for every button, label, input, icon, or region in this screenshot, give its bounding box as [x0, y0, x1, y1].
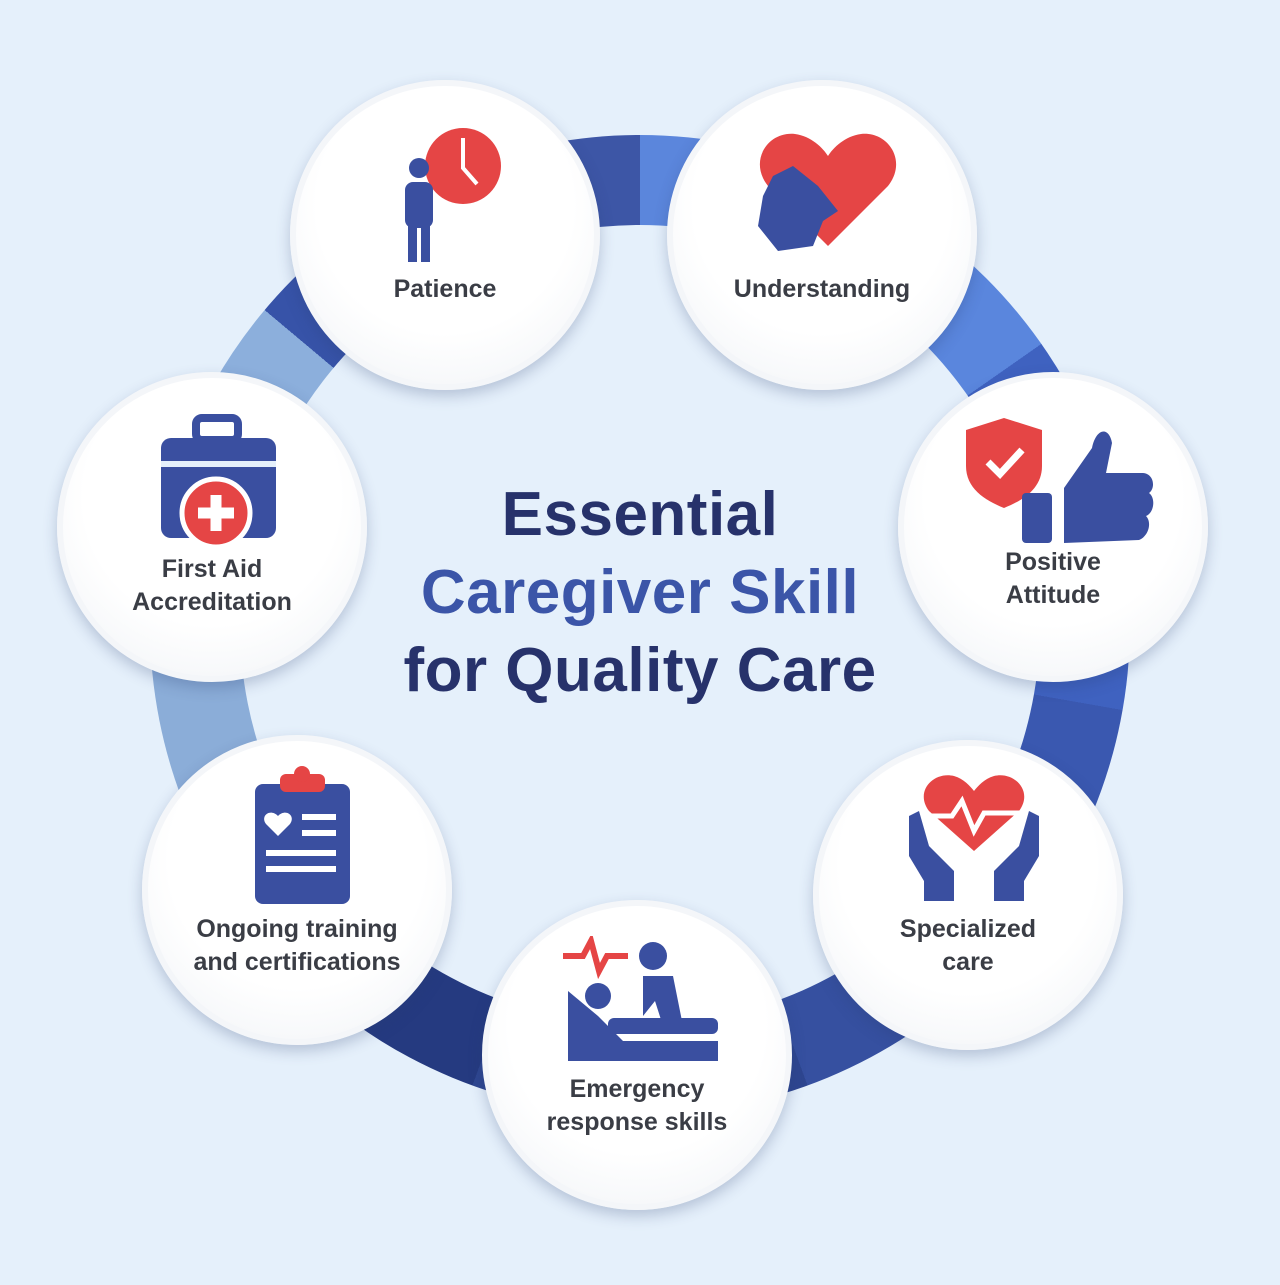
title: for Quality Care	[403, 636, 877, 705]
circle: Emergency response skills: response skills	[547, 1108, 727, 1136]
circle: Specialized care	[813, 740, 1123, 1050]
icon: clipboard	[255, 766, 350, 904]
icon: person clock	[405, 128, 501, 262]
icon: heart hand	[758, 134, 896, 251]
circle: Ongoing training: and certifications	[194, 948, 400, 976]
circle: First Aid Accreditation	[57, 372, 367, 682]
circle: Ongoing training: Ongoing training	[196, 915, 398, 943]
circle: Emergency response skills	[482, 900, 792, 1210]
circle: Emergency response skills: Emergency	[570, 1075, 704, 1103]
circle: Specialized care: care	[942, 948, 994, 976]
ring	[150, 135, 1130, 1115]
circle: Understanding: Understanding	[734, 275, 910, 303]
icon: hands heart	[909, 775, 1039, 901]
title: Essential	[502, 480, 778, 549]
circle: Ongoing training	[142, 735, 452, 1045]
circle: First Aid Accreditation: Accreditation	[132, 588, 292, 616]
circle: Patience	[290, 80, 600, 390]
icon: shield thumb	[966, 418, 1154, 543]
title: Caregiver Skill	[421, 558, 859, 627]
circle: Positive Attitude	[898, 372, 1208, 682]
circle: First Aid Accreditation: First Aid	[162, 555, 262, 583]
circle: Specialized care: Specialized	[900, 915, 1036, 943]
circle: Understanding	[667, 80, 977, 390]
circle: Patience: Patience	[394, 275, 496, 303]
icon: first aid kit	[161, 414, 276, 544]
circle: Positive Attitude: Positive	[1005, 548, 1101, 576]
title	[403, 480, 877, 705]
icon: patient bed	[563, 936, 718, 1061]
circle: Positive Attitude: Attitude	[1006, 581, 1100, 609]
